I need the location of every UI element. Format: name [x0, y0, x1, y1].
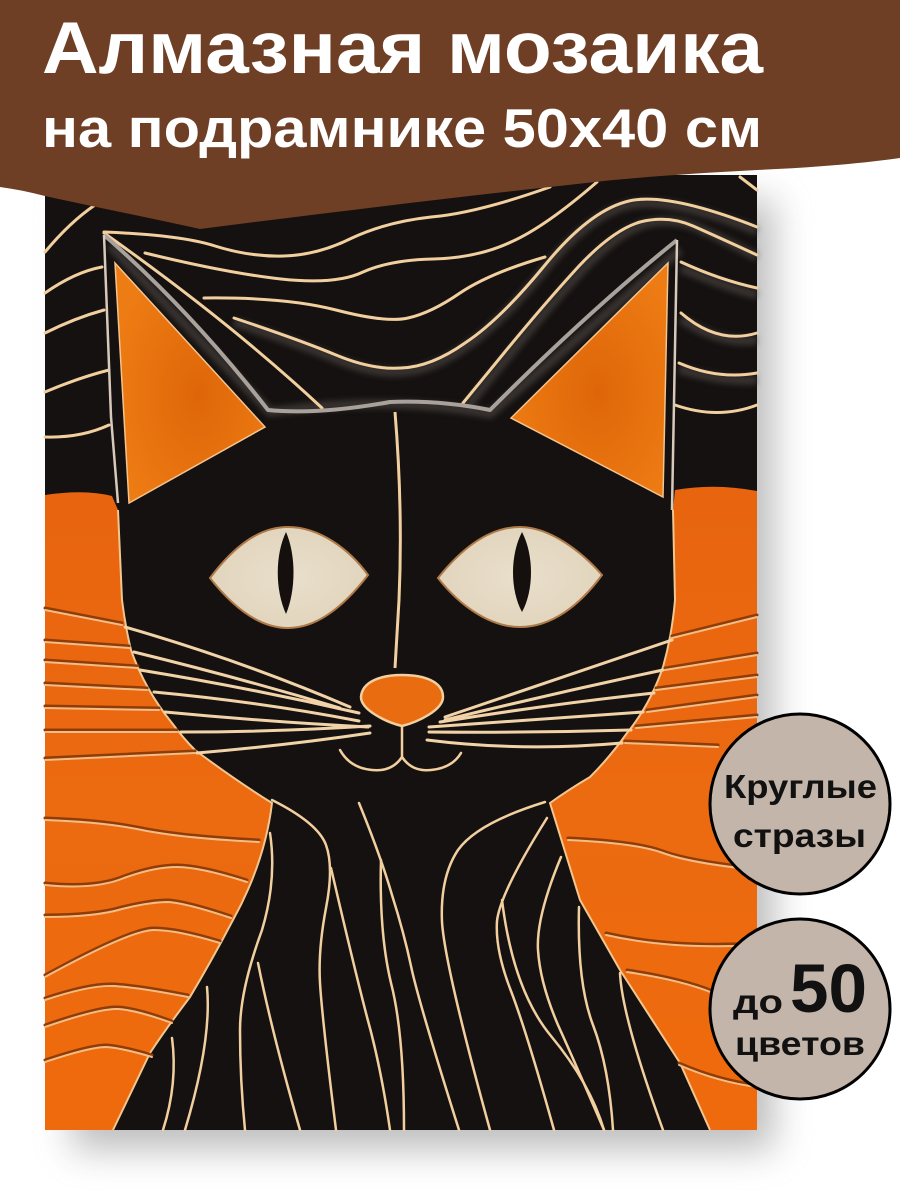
- header banner: [0, 0, 900, 229]
- orange side line shadows: [45, 608, 757, 1085]
- title: Алмазная мозаика: [42, 8, 765, 89]
- right ear: [511, 263, 668, 497]
- head edge lines: [113, 510, 710, 1130]
- wave highlight glow: [110, 203, 757, 414]
- whiskers: [125, 627, 672, 753]
- canvas shadow: [72, 200, 774, 1150]
- left eye: [210, 527, 368, 628]
- badge: round rhinestones: стразы: [733, 817, 866, 854]
- painting: cat mosaic: [45, 175, 757, 1130]
- badge: up to 50 colors: цветов: [735, 1025, 865, 1062]
- left ear: [115, 263, 265, 503]
- badge: round rhinestones: Круглые: [724, 768, 877, 805]
- mouth: [340, 727, 461, 770]
- background wave lines: [45, 177, 757, 437]
- badge: up to 50 colors: [710, 919, 890, 1099]
- badge: up to 50 colors: 50: [790, 950, 867, 1027]
- orange side lines: [45, 610, 757, 1087]
- subtitle: на подрамнике 50х40 см: [42, 97, 762, 159]
- nose: [361, 675, 443, 726]
- cat head outline: [104, 235, 677, 668]
- badge: up to 50 colors: до: [733, 983, 783, 1020]
- right orange area: [550, 487, 757, 1130]
- left orange area: [45, 492, 272, 1130]
- body lines: [163, 800, 663, 1130]
- badge: round rhinestones: [710, 714, 890, 894]
- painting background: [45, 175, 757, 1130]
- right eye: [438, 527, 602, 627]
